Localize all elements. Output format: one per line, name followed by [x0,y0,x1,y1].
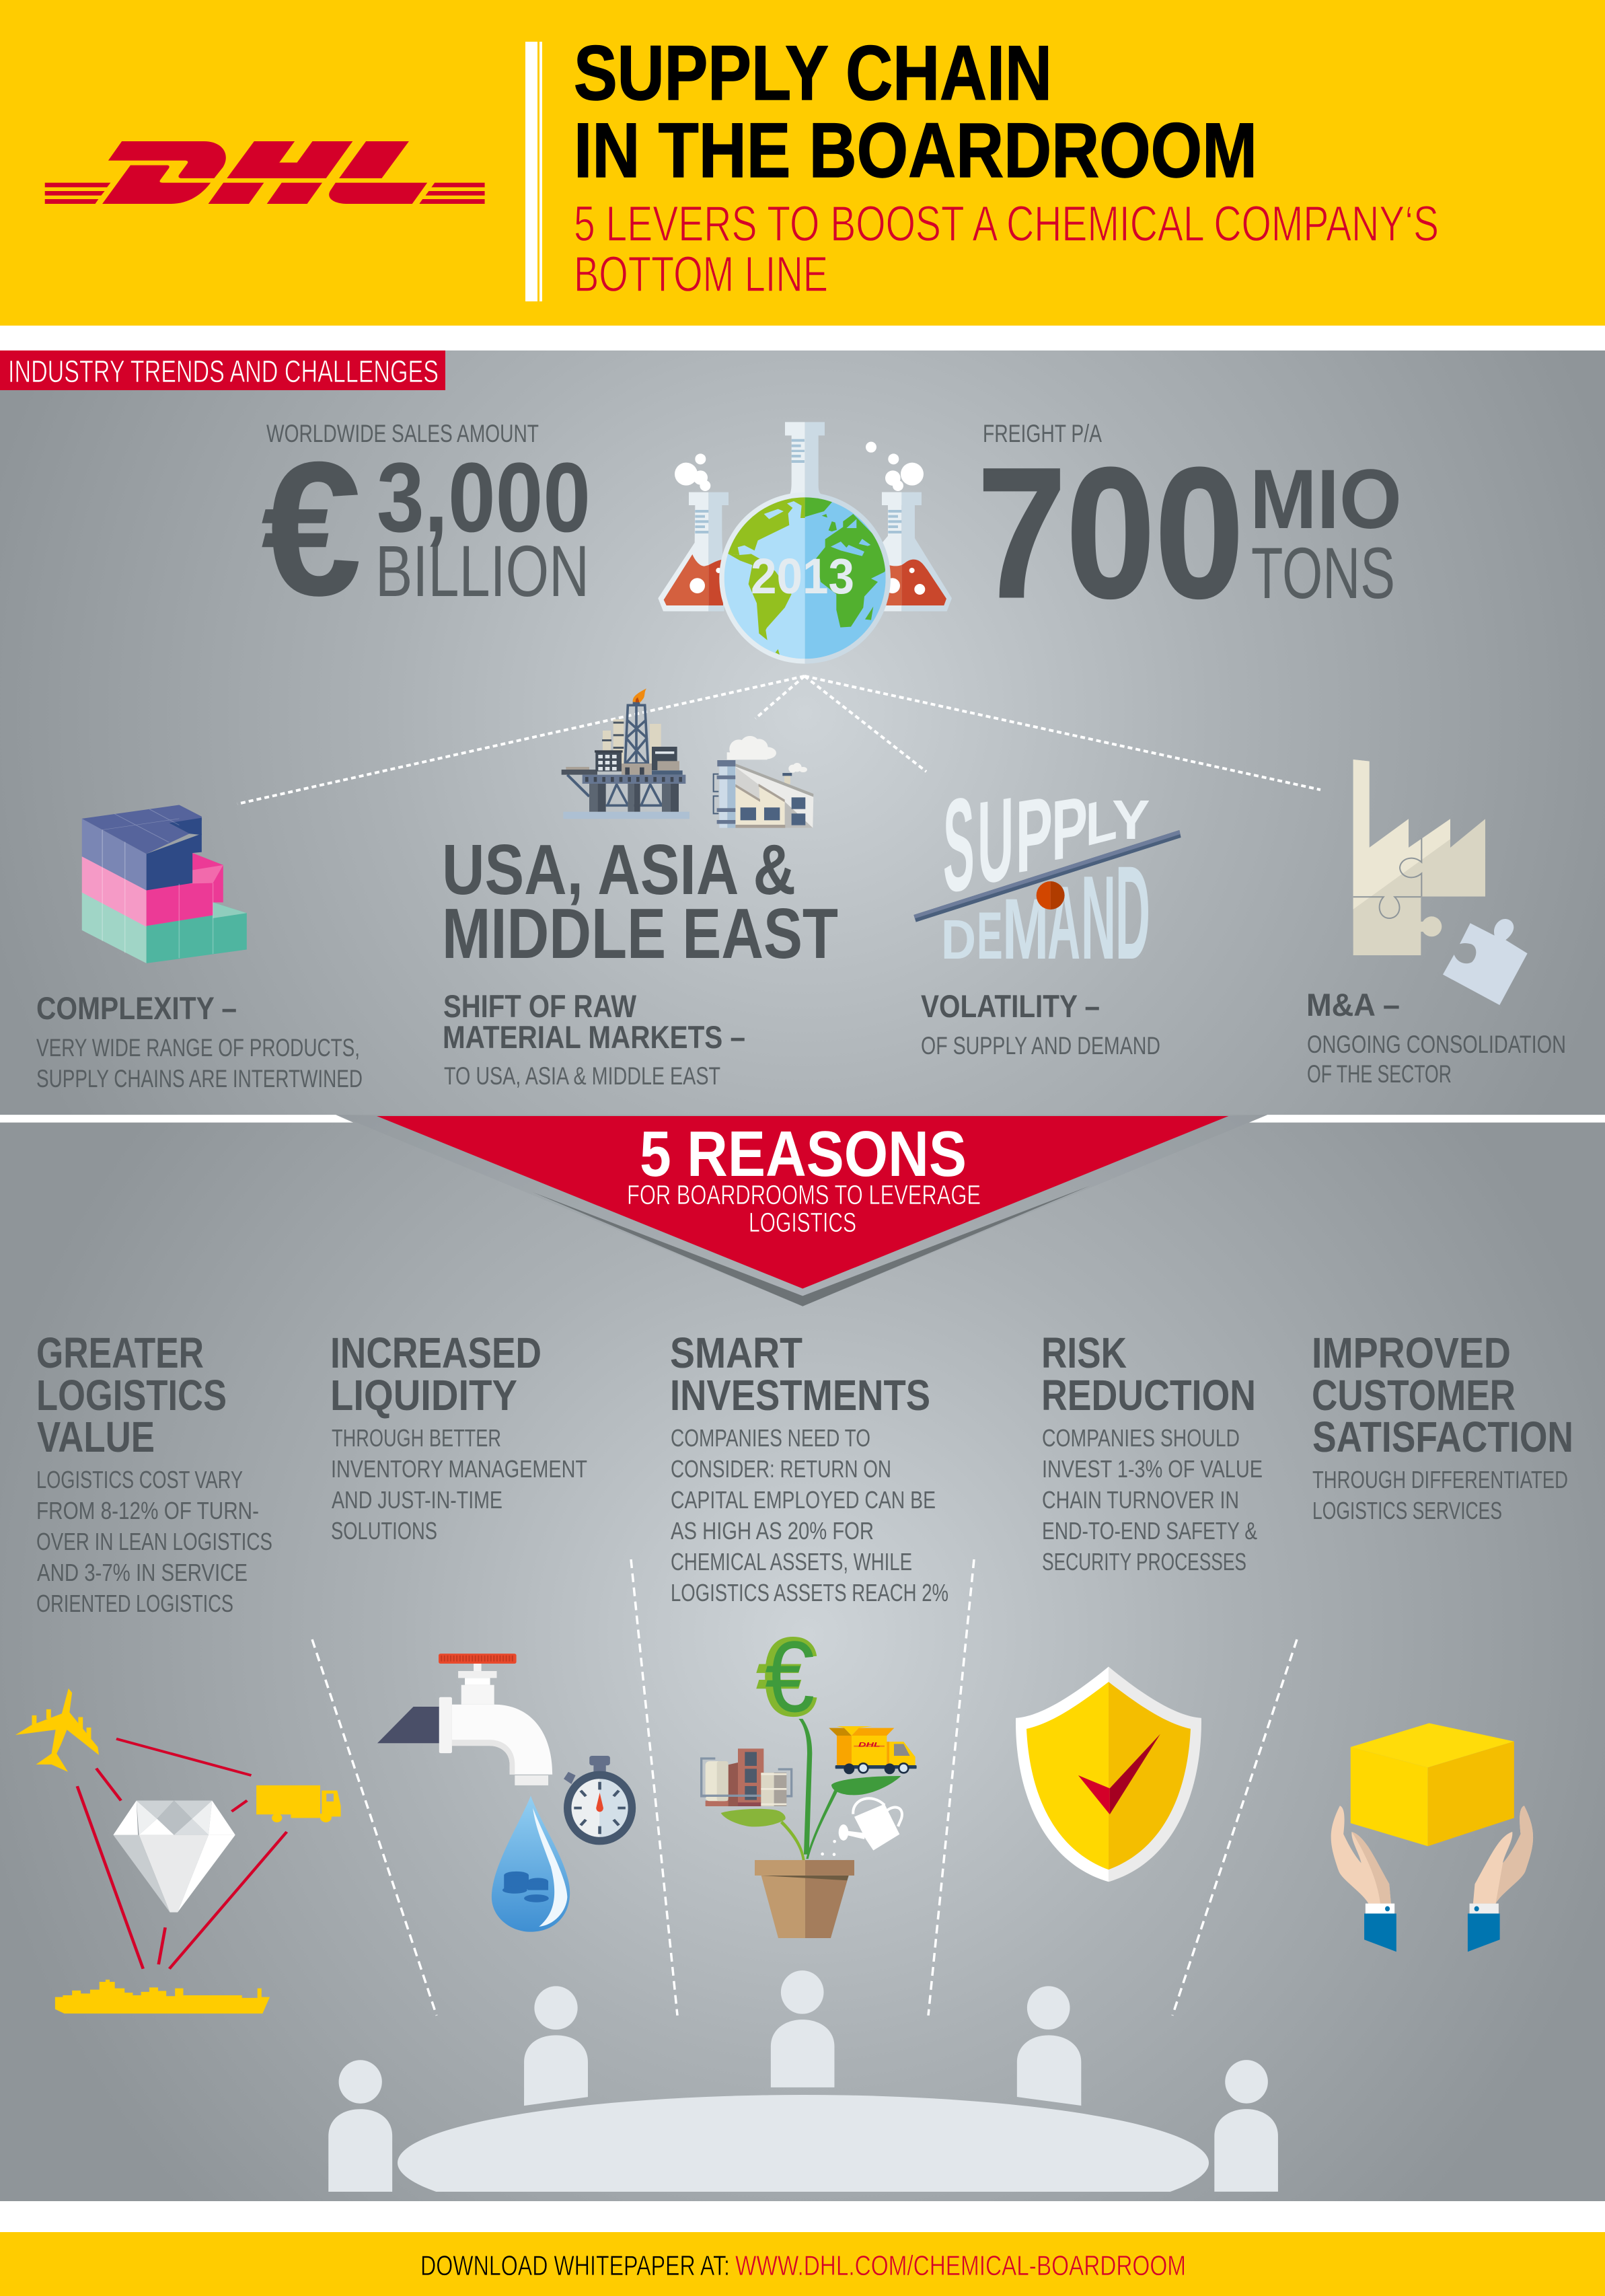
panel: industry trends background [0,350,1605,1115]
headline: USA, Asia and Middle East: MIDDLE EAST [442,894,838,973]
reason 1: greater logistics value: FROM 8-12% OF TURN- [36,1497,259,1524]
reason 4: risk reduction: SECURITY PROCESSES [1042,1548,1246,1576]
banner: 5 reasons arrow [338,1115,1267,1306]
header band [0,0,1605,326]
reason 2: increased liquidity [330,1329,587,1545]
footer band: WWW.DHL.COM/CHEMICAL-BOARDROOM [735,2250,1186,2281]
reason 3: smart investments: LOGISTICS ASSETS REACH 2% [671,1579,948,1606]
stat: freight: FREIGHT P/A [983,420,1102,447]
reason 4: risk reduction: RISK [1041,1329,1127,1377]
icon: money plant: DHL [858,1741,881,1748]
reason 1: greater logistics value [36,1329,272,1617]
stat: worldwide sales: € [261,422,362,636]
reason 2: increased liquidity: SOLUTIONS [331,1517,437,1545]
reason 1: greater logistics value: ORIENTED LOGISTICS [36,1590,233,1617]
banner text [627,1118,981,1238]
reason 3: smart investments: CHEMICAL ASSETS, WHILE [671,1548,912,1576]
trend: complexity: VERY WIDE RANGE OF PRODUCTS, [36,1034,360,1062]
icon: tap, drop and stopwatch [377,1654,636,1932]
trend: complexity [36,990,363,1093]
icon: shield [1016,1667,1201,1882]
panel: five reasons background [0,1115,1605,2201]
reason 5: improved customer satisfaction: LOGISTICS SERVICES [1312,1497,1502,1524]
reason 4: risk reduction: END-TO-END SAFETY & [1042,1517,1257,1545]
footer band: DOWNLOAD WHITEPAPER AT: [420,2250,730,2281]
icon: money plant [702,1615,917,1938]
icon: supply and demand seesaw: D [941,909,976,971]
reason 1: greater logistics value: VALUE [37,1413,155,1461]
icon: supply and demand seesaw: Y [1112,788,1150,851]
trend: complexity: SUPPLY CHAINS ARE INTERTWINED [36,1065,363,1093]
trend: volatility [921,988,1160,1060]
trend: volatility: VOLATILITY – [921,988,1100,1024]
trend: M and A: OF THE SECTOR [1307,1060,1452,1088]
title: IN THE BOARDROOM [574,108,1257,194]
dashed connectors from globe [237,676,1320,804]
section label: INDUSTRY TRENDS AND CHALLENGES [8,354,439,389]
dashed dividers between reasons [312,1559,1297,2015]
icon: supply and demand seesaw: M [1002,881,1049,977]
trend: shift of raw material markets: TO USA, ASIA & MIDDLE EAST [444,1062,720,1090]
icon: supply and demand seesaw: A [1047,865,1080,982]
stat: freight: MIO [1250,453,1402,546]
reason 1: greater logistics value: LOGISTICS [36,1371,227,1419]
trend: complexity: COMPLEXITY – [36,990,237,1026]
section label [0,350,445,390]
stat: worldwide sales [261,420,591,636]
icon: factory [714,736,813,828]
reason 3: smart investments: CONSIDER: RETURN ON [671,1455,891,1483]
title [574,30,1257,194]
subtitle: BOTTOM LINE [574,246,828,302]
reason 5: improved customer satisfaction [1312,1329,1573,1524]
subtitle [574,196,1439,302]
reason 5: improved customer satisfaction: CUSTOMER [1312,1371,1516,1419]
reason 1: greater logistics value: OVER IN LEAN LOGISTICS [36,1528,272,1555]
trend: shift of raw material markets: MATERIAL MARKETS – [443,1019,745,1055]
trend: shift of raw material markets [443,988,745,1090]
trend: shift of raw material markets: SHIFT OF RAW [443,988,637,1024]
icon: supply and demand seesaw: D [1115,838,1150,988]
headline: USA, Asia and Middle East: USA, ASIA & [442,830,796,910]
reason 2: increased liquidity: LIQUIDITY [330,1371,517,1419]
banner text: FOR BOARDROOMS TO LEVERAGE [627,1179,981,1210]
reason 2: increased liquidity: INCREASED [330,1329,542,1377]
reason 4: risk reduction: REDUCTION [1041,1371,1256,1419]
reason 2: increased liquidity: THROUGH BETTER [332,1424,501,1452]
stat: worldwide sales: BILLION [375,530,589,612]
stat: worldwide sales: WORLDWIDE SALES AMOUNT [266,420,539,447]
icon: supply and demand seesaw: P [1051,778,1088,879]
reason 1: greater logistics value: LOGISTICS COST VARY [36,1466,243,1493]
trend: M and A [1306,987,1566,1088]
header divider [525,42,542,301]
banner text: LOGISTICS [749,1207,856,1238]
globe year: 2013 [751,548,854,604]
title: SUPPLY CHAIN [574,30,1052,116]
icon: supply and demand seesaw: E [977,899,1003,973]
reason 4: risk reduction: COMPANIES SHOULD [1042,1424,1240,1452]
stat: worldwide sales: 3,000 [377,443,591,553]
reason 5: improved customer satisfaction: IMPROVED [1312,1329,1511,1377]
reason 3: smart investments: INVESTMENTS [670,1371,930,1419]
icon: supply and demand seesaw: U [977,772,1014,910]
icon: supply and demand seesaw: N [1081,851,1116,984]
reason 1: greater logistics value: GREATER [36,1329,204,1377]
reason 2: increased liquidity: AND JUST-IN-TIME [332,1486,502,1514]
reason 2: increased liquidity: INVENTORY MANAGEMENT [331,1455,587,1483]
icon: puzzle factory [1353,760,1528,1005]
icon: supply and demand seesaw: S [943,770,975,922]
reason 4: risk reduction: INVEST 1-3% OF VALUE [1042,1455,1263,1483]
icon: complexity blocks [82,805,247,963]
stat: freight: TONS [1251,532,1395,614]
stat: freight: 700 [977,430,1244,636]
DHL logo [45,141,485,204]
icon: supply and demand seesaw [913,770,1181,988]
footer band [0,2232,1605,2296]
reason 3: smart investments: COMPANIES NEED TO [671,1424,870,1452]
icon: supply and demand seesaw: P [1016,774,1053,895]
banner text: 5 REASONS [640,1118,967,1190]
stat: freight [977,420,1402,636]
icon: money plant: € [757,1615,817,1738]
reason 4: risk reduction: CHAIN TURNOVER IN [1042,1486,1239,1514]
headline: USA, Asia and Middle East [442,830,838,973]
boardroom table and people [328,1970,1278,2192]
white divider strips [0,1115,1605,1123]
trend: M and A: M&A – [1306,987,1400,1023]
trend: volatility: OF SUPPLY AND DEMAND [921,1032,1160,1060]
reason 3: smart investments [670,1329,948,1606]
icon: flasks and globe [658,422,952,664]
icon: box in hands [1331,1724,1533,1952]
reason 3: smart investments: SMART [670,1329,803,1377]
reason 4: risk reduction [1041,1329,1263,1576]
reason 1: greater logistics value: AND 3-7% IN SERVICE [37,1559,248,1586]
reason 3: smart investments: CAPITAL EMPLOYED CAN BE [671,1486,936,1514]
icon: diamond and transport network [15,1689,341,2013]
icon: money plant: € [765,1620,815,1733]
icon: oil rig [562,688,689,819]
icon: supply and demand seesaw: L [1086,784,1117,860]
reason 3: smart investments: AS HIGH AS 20% FOR [671,1517,874,1545]
